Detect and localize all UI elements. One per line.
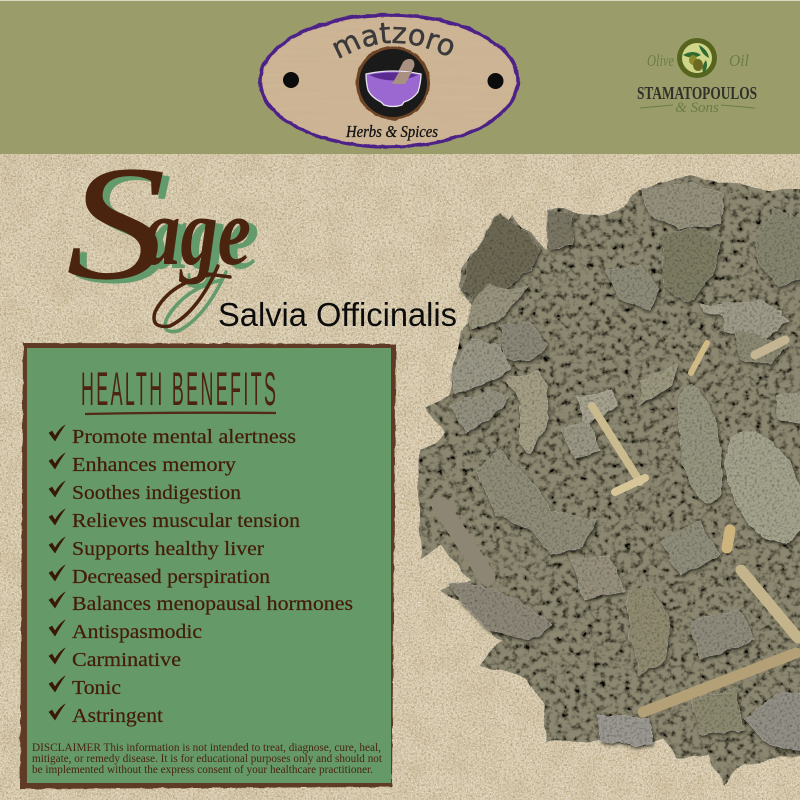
title lettering: S [66,133,166,314]
title shadow: age [151,182,259,289]
disclaimer: be implemented without the express consent of your healthcare practitioner. [32,764,373,776]
panel heading: HEALTH BENEFITS [81,363,276,416]
title: Sage [66,133,259,318]
benefit: relieves muscular tension: Relieves muscular tension [72,510,300,532]
benefit: soothes indigestion: Soothes indigestion [72,482,241,504]
logo plate [260,15,518,147]
heap stems [440,340,798,712]
title: g descender swash [154,266,230,331]
logo holes [283,72,504,89]
title shadow: S [73,137,173,318]
title lettering [66,133,251,314]
benefit: balances menopausal hormones: Balances menopausal hormones [72,593,353,615]
title shadow [73,137,259,318]
heading underline [85,413,276,414]
logo emblem: mortar and pestle [356,46,430,120]
olive oil caption: Olive [647,51,674,70]
panel card [20,343,396,789]
benefit: astringent: Astringent [72,705,163,727]
benefit: promote mental alertness: Promote mental alertness [72,426,296,448]
benefit: antispasmodic: Antispasmodic [72,621,202,643]
benefit: tonic [49,676,121,699]
image: dried sage heap [417,176,800,785]
sons caption: & Sons [675,100,719,116]
benefit: enhances memory: Enhances memory [72,454,237,476]
logo: matzoro oval badge [258,12,520,149]
logo wordmark: matzoro [332,22,454,58]
heap leaves [447,182,800,753]
panel: health benefits [20,343,396,789]
benefit: decreased perspiration: Decreased perspiration [72,566,270,588]
disclaimer: DISCLAIMER This information is not intended to treat, diagnose, cure, heal, [32,742,381,754]
logo tagline: Herbs & Spices [345,122,438,141]
olive oil caption [647,51,749,70]
benefit: carminative: Carminative [72,649,181,671]
header band [0,0,800,154]
brand name: STAMATOPOULOS [637,83,757,103]
disclaimer [32,742,383,776]
olive oil caption: Oil [729,51,749,70]
benefit: tonic: Tonic [72,677,121,699]
subtitle: Salvia Officinalis: Salvia Officinalis [218,296,457,333]
heap base [417,176,800,785]
olive emblem [677,38,717,78]
logo: Stamatopoulos olive oil [637,38,757,116]
title lettering: age [143,178,251,285]
benefit: supports healthy liver: Supports healthy liver [72,538,264,560]
disclaimer: mitigate, or remedy disease. It is for educational purposes only and should not [32,753,383,765]
